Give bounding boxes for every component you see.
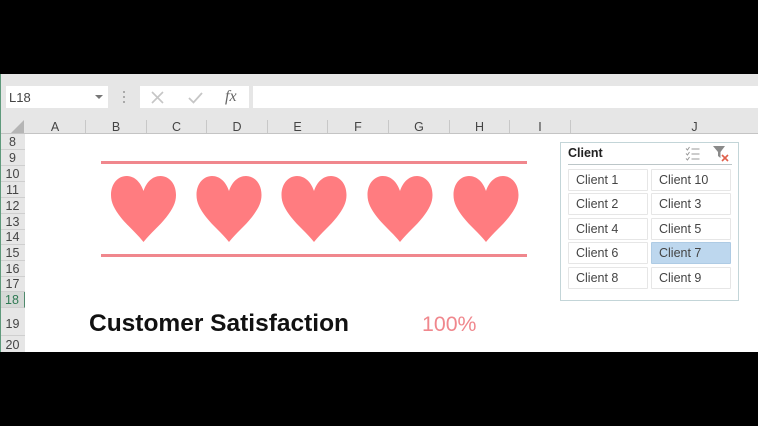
slicer divider	[568, 164, 732, 165]
select-all corner	[11, 120, 24, 133]
slicer buttons	[568, 169, 731, 289]
row headers: 16	[6, 262, 19, 276]
row headers: 17	[6, 277, 19, 291]
row headers: 8	[9, 135, 16, 149]
spreadsheet window	[0, 74, 758, 352]
row headers: 9	[9, 151, 16, 165]
icon: multi-select	[686, 146, 700, 161]
window left edge	[0, 74, 1, 352]
row headers: 12	[6, 199, 19, 213]
column headers: G	[414, 120, 424, 134]
top rule	[101, 161, 527, 164]
slicer title: Client	[568, 146, 603, 160]
formula buttons	[140, 86, 249, 108]
row headers: 15	[6, 246, 19, 260]
row headers: 20	[6, 338, 19, 352]
panel: client slicer	[560, 142, 739, 301]
bottom rule	[101, 254, 527, 257]
column headers: E	[293, 120, 302, 134]
column headers: F	[354, 120, 362, 134]
row headers: 13	[6, 215, 19, 229]
column headers	[51, 120, 698, 134]
column headers: I	[538, 120, 542, 134]
slicer buttons: Client 8	[576, 271, 618, 285]
column headers: C	[172, 120, 181, 134]
icon: cancel	[152, 92, 164, 104]
column headers: A	[51, 120, 59, 134]
slicer buttons: Client 9	[659, 271, 701, 285]
row headers: 14	[6, 230, 19, 244]
name box	[6, 86, 108, 108]
slicer buttons: Client 1	[576, 173, 618, 187]
slicer buttons: Client 10	[659, 173, 708, 187]
column headers: B	[112, 120, 120, 134]
value: 100%: 100%	[422, 312, 476, 336]
row headers: 19	[6, 317, 19, 331]
slicer buttons: Client 4	[576, 222, 618, 236]
formula input	[253, 86, 758, 108]
slicer buttons: Client 7	[659, 246, 701, 260]
row headers: 10	[6, 167, 19, 181]
slicer buttons: Client 5	[659, 222, 701, 236]
heading: Customer Satisfaction: Customer Satisfaction	[89, 310, 349, 337]
row headers: 11	[6, 183, 19, 197]
column headers: J	[691, 120, 698, 134]
column headers: H	[475, 120, 484, 134]
icon: clear filter	[713, 146, 728, 162]
formula bar separator dots	[123, 91, 125, 104]
icon: function: fx	[225, 88, 237, 105]
slicer buttons: Client 3	[659, 197, 701, 211]
ribbon: formula bar and column headers	[0, 74, 758, 134]
name box: L18	[9, 90, 31, 105]
icon: confirm	[188, 92, 202, 104]
hearts	[111, 176, 518, 242]
slicer buttons: Client 6	[576, 246, 618, 260]
column headers: D	[232, 120, 242, 134]
row headers	[0, 134, 25, 352]
slicer buttons: Client 2	[576, 197, 618, 211]
row headers: 18	[5, 293, 19, 307]
